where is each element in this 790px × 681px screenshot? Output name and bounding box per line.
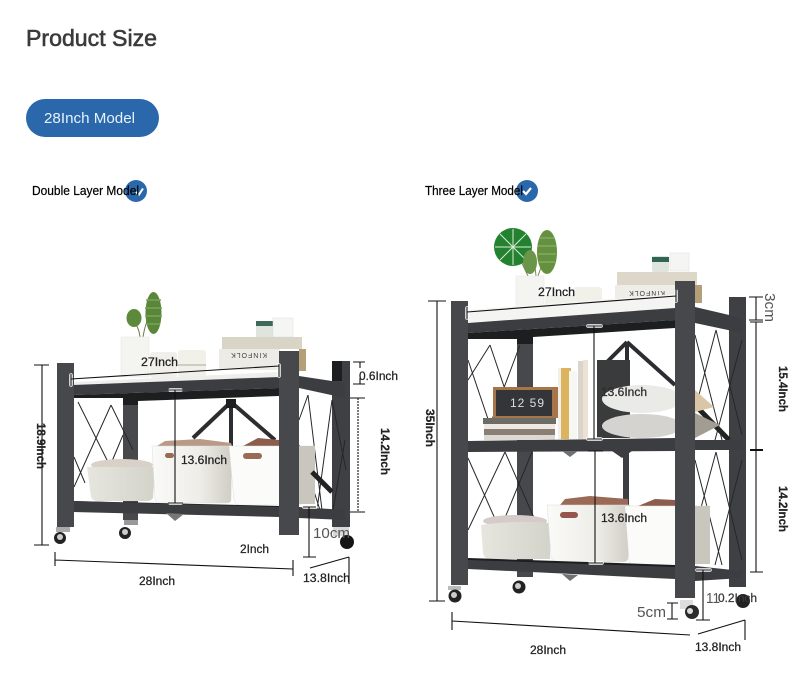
right side lattice: [299, 395, 346, 510]
dimension 27Inch: [71, 357, 279, 386]
dimension 13.6Inch lower: 13.6Inch: [601, 513, 647, 525]
title: Product Size: [26, 25, 157, 51]
back left post: [517, 340, 533, 577]
dimensions: three layer shelf: [423, 287, 788, 657]
button: 28Inch Model: [26, 99, 159, 137]
dimension 10cm: [303, 507, 350, 557]
front posts: [57, 363, 74, 527]
dimension 18.9Inch: 18.9Inch: [34, 423, 46, 469]
dimension 27Inch: [467, 287, 676, 319]
dimension 35Inch: 35Inch: [423, 409, 435, 447]
decor on top of three layer shelf: [494, 228, 702, 313]
dimension 11 and 0.2Inch overlap: 0.2Inch: [718, 593, 757, 605]
casters: [54, 520, 354, 549]
decor on top of three layer shelf: KINFOLK: [628, 289, 665, 296]
dimension 27Inch: 27Inch: [141, 357, 178, 369]
middle tier: clock, books and pillows: [483, 360, 720, 440]
dimension 13.8Inch: 13.8Inch: [695, 642, 741, 654]
dimensions: double layer shelf: [34, 357, 398, 588]
middle shelf: [468, 438, 742, 458]
storage baskets: [87, 438, 315, 505]
diagonal strut: [312, 472, 332, 492]
dimension 18.9Inch: [34, 365, 49, 545]
dimension 28Inch: [55, 552, 293, 588]
back right post: [332, 361, 350, 527]
dimension 3cm: [749, 293, 778, 322]
dimension 11 and 0.2Inch overlap: [696, 570, 757, 620]
left side lattice: [74, 402, 133, 495]
dimension 0.6Inch: [353, 362, 398, 384]
casters: [448, 580, 750, 619]
dimension 10cm: 10cm: [313, 525, 350, 542]
brace: [193, 402, 275, 448]
dimension 15.4Inch: [750, 322, 788, 450]
top shelf: [468, 294, 742, 344]
middle tier: clock, books and pillows: 12 59: [510, 396, 545, 410]
label: three layer model: [425, 180, 538, 202]
dimension 14.2Inch: 14.2Inch: [776, 486, 788, 532]
dimension 2Inch: 2Inch: [240, 544, 269, 556]
dimension 11 and 0.2Inch overlap: 11: [706, 590, 720, 607]
product: double layer shelf: [54, 292, 354, 549]
bottom shelf: [73, 501, 345, 521]
dimension 28Inch: 28Inch: [530, 645, 566, 657]
dimension 15.4Inch: 15.4Inch: [776, 366, 788, 412]
top shelf: [73, 372, 345, 405]
dimension 13.8Inch: 13.8Inch: [303, 573, 350, 585]
dimension 28Inch: 28Inch: [139, 576, 175, 588]
button: 28Inch Model: 28Inch Model: [44, 110, 135, 127]
lattices: [468, 330, 742, 565]
brace: [605, 342, 675, 385]
diagonal struts: [695, 405, 729, 440]
bottom tier baskets: [481, 496, 710, 567]
dimension 14.2Inch: [350, 398, 390, 512]
dimension 13.6Inch lower: [588, 451, 647, 563]
dimension 27Inch: 27Inch: [538, 287, 575, 299]
label: double layer model: Double Layer Model: [32, 184, 139, 198]
decor on top of double shelf: KINFOLK: [230, 351, 267, 358]
front posts: [451, 301, 468, 585]
dimension 0.6Inch: 0.6Inch: [359, 371, 398, 383]
decor on top of double shelf: [121, 292, 306, 378]
dimension 14.2Inch: [750, 451, 788, 572]
label: double layer model: [32, 180, 147, 202]
dimension 13.8Inch: [303, 557, 350, 585]
dimension 13.6Inch upper: 13.6Inch: [601, 387, 647, 399]
dimension 5cm: [637, 603, 678, 621]
bottom shelf: [468, 558, 742, 581]
label: three layer model: Three Layer Model: [425, 184, 523, 198]
dimension 14.2Inch: 14.2Inch: [378, 428, 390, 475]
dimension 13.6Inch upper: [587, 326, 647, 439]
dimension 5cm: 5cm: [637, 604, 666, 621]
dimension 3cm: 3cm: [761, 293, 778, 322]
product: three layer shelf: [448, 228, 750, 619]
dimension 28Inch: [452, 612, 690, 657]
dimension 35Inch: [423, 301, 446, 601]
back left post: [123, 398, 138, 520]
dimension 13.6Inch: [168, 390, 227, 503]
dimension 13.8Inch: [695, 620, 745, 654]
back right post: [729, 297, 746, 587]
dimension 13.6Inch: 13.6Inch: [181, 455, 227, 467]
